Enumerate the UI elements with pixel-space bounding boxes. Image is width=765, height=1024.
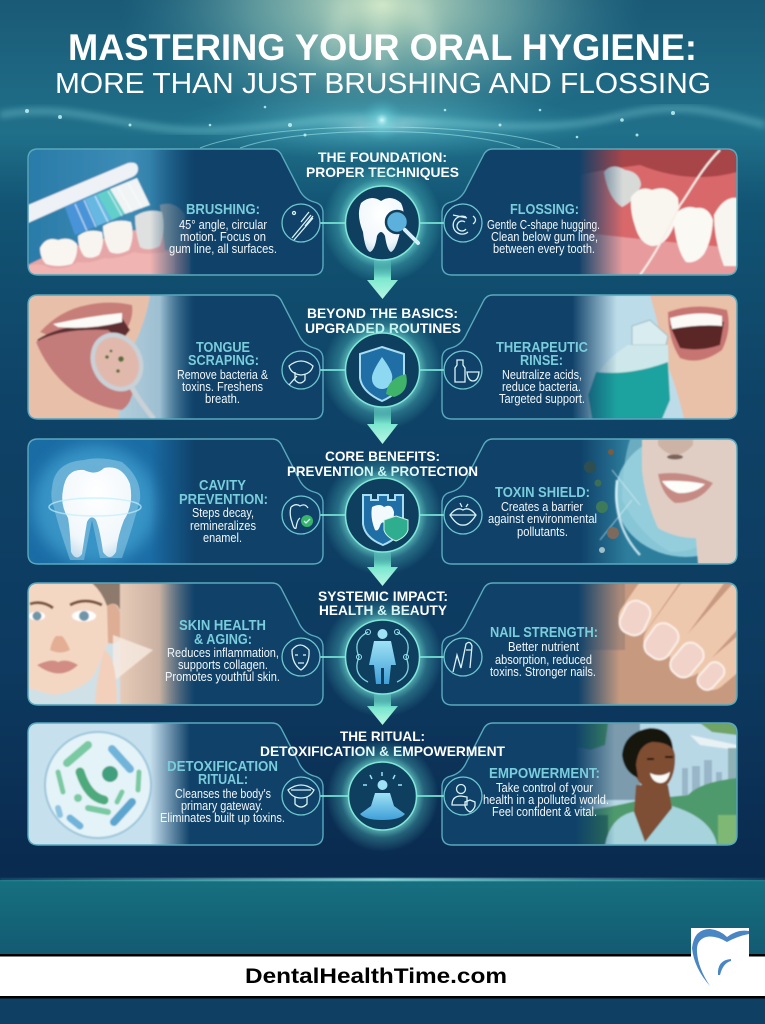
label: nail strength: absorption, reduced: [495, 652, 592, 667]
title: [55, 27, 711, 100]
icon: tongue: [282, 351, 320, 389]
panel: skin health: [28, 583, 323, 705]
panel: flossing: [442, 149, 737, 275]
label: cavity prevention: PREVENTION:: [179, 492, 268, 508]
label: cavity prevention: CAVITY: [199, 478, 246, 494]
label: detoxification ritual: Eliminates built up toxins.: [160, 810, 285, 825]
icon: meditating person: [326, 740, 438, 852]
icon: tooth with magnifier: [322, 163, 442, 283]
label: tongue scraping: SCRAPING:: [188, 353, 259, 369]
label: tongue scraping: toxins. Freshens: [182, 379, 263, 394]
icon: shield with tooth: [322, 455, 442, 575]
label: tongue scraping: TONGUE: [196, 340, 250, 356]
logo: blue tooth: [691, 928, 749, 986]
label: empowerment: Take control of your: [496, 780, 594, 795]
label: tongue scraping: Remove bacteria &: [177, 367, 268, 382]
label: brushing: gum line, all surfaces.: [169, 241, 277, 256]
label: detoxification ritual: [160, 759, 285, 825]
title: MASTERING YOUR ORAL HYGIENE:: [68, 27, 697, 68]
label: empowerment: EMPOWERMENT:: [489, 766, 600, 782]
teal footer band: [0, 878, 765, 955]
label: tongue scraping: [177, 340, 268, 406]
icon: lips: [444, 496, 482, 534]
label: cavity prevention: [179, 478, 268, 545]
heading: beyond the basics: UPGRADED ROUTINES: [305, 320, 461, 336]
label: nail strength: [490, 625, 598, 679]
heading: the ritual: [260, 728, 505, 759]
label: brushing: motion. Focus on: [180, 229, 266, 244]
label: skin health: & AGING:: [194, 632, 252, 648]
heading: core benefits: CORE BENEFITS:: [325, 448, 440, 464]
label: empowerment: [483, 766, 609, 819]
connector: [320, 222, 445, 224]
label: toxin shield: against environmental: [488, 511, 597, 526]
label: cavity prevention: remineralizes: [190, 518, 256, 533]
label: tongue scraping: breath.: [205, 391, 240, 406]
label: toxin shield: Creates a barrier: [501, 499, 584, 514]
photo: face in protective bubble: [584, 440, 736, 564]
label: toxin shield: pollutants.: [517, 524, 568, 539]
label: therapeutic rinse: RINSE:: [520, 353, 563, 369]
icon: human figure network: [322, 597, 442, 717]
panel: tongue scraping: [28, 295, 323, 419]
heading: systemic impact: HEALTH & BEAUTY: [319, 602, 448, 618]
label: brushing: [169, 202, 277, 256]
heading: beyond the basics: [305, 305, 461, 336]
icon: finger nail: [444, 638, 482, 676]
icon: person with shield: [444, 777, 482, 815]
footer strip with website: [0, 954, 765, 1024]
label: toxin shield: TOXIN SHIELD:: [495, 485, 590, 501]
icon: toothbrush: [282, 204, 320, 242]
connector: [320, 656, 445, 658]
heading: the ritual: THE RITUAL:: [340, 728, 425, 744]
label: cavity prevention: enamel.: [203, 530, 242, 545]
label: therapeutic rinse: Neutralize acids,: [502, 367, 582, 382]
photo: glowing tooth: [28, 440, 189, 564]
label: flossing: between every tooth.: [493, 241, 595, 256]
label: detoxification ritual: DETOXIFICATION: [167, 759, 278, 775]
panel: nail strength: [441, 582, 738, 706]
label: empowerment: Feel confident & vital.: [492, 804, 597, 819]
label: detoxification ritual: Cleanses the body's: [175, 786, 271, 801]
label: nail strength: Better nutrient: [508, 639, 579, 654]
connector: [320, 795, 445, 797]
heading: the foundation: [306, 149, 459, 180]
panel: detoxification ritual: [28, 723, 323, 845]
icon: face: [282, 638, 320, 676]
label: flossing: [487, 202, 600, 256]
connecting arrows: [367, 258, 398, 725]
row 1: [28, 149, 737, 283]
heading: the foundation: PROPER TECHNIQUES: [306, 164, 459, 180]
label: therapeutic rinse: Targeted support.: [499, 391, 585, 406]
heading: systemic impact: SYSTEMIC IMPACT:: [318, 588, 448, 604]
panel: empowerment: [442, 723, 737, 845]
label: toxin shield: [488, 485, 597, 539]
photo: woman's face and skin: [28, 584, 192, 704]
label: brushing: BRUSHING:: [186, 202, 260, 218]
label: skin health: SKIN HEALTH: [179, 618, 266, 634]
photo: bacteria in bubble: [28, 724, 188, 844]
heading: the foundation: THE FOUNDATION:: [318, 149, 447, 165]
heading: systemic impact: [318, 588, 448, 618]
panel: toxin shield: [442, 433, 757, 564]
panel: cavity prevention: [28, 439, 323, 565]
row 4: [27, 582, 738, 714]
icon: bottle and bowl: [444, 351, 482, 389]
label: skin health: supports collagen.: [178, 657, 268, 672]
photo: smiling woman in park: [577, 724, 736, 844]
label: flossing: FLOSSING:: [510, 202, 579, 218]
label: skin health: Reduces inflammation,: [167, 645, 279, 660]
label: nail strength: NAIL STRENGTH:: [490, 625, 598, 641]
label: flossing: Gentle C-shape hugging.: [487, 217, 600, 232]
panel: brushing: [28, 149, 323, 275]
photo: hand with nails: [580, 584, 736, 704]
heading: core benefits: [287, 448, 478, 479]
label: nail strength: toxins. Stronger nails.: [490, 664, 596, 679]
footer strip with website: DentalHealthTime.com: [245, 965, 507, 988]
label: empowerment: health in a polluted world.: [483, 792, 609, 807]
icon: floss: [444, 204, 482, 242]
heading: core benefits: PREVENTION & PROTECTION: [287, 463, 478, 479]
label: cavity prevention: Steps decay,: [192, 505, 254, 520]
label: skin health: Promotes youthful skin.: [165, 669, 280, 684]
label: therapeutic rinse: reduce bacteria.: [502, 379, 581, 394]
label: therapeutic rinse: THERAPEUTIC: [496, 340, 588, 356]
label: therapeutic rinse: [496, 340, 588, 406]
photo: mouth and rinse bottle: [574, 296, 736, 418]
photo: tongue and scraper: [28, 296, 190, 418]
row 2: [28, 295, 737, 430]
heading: beyond the basics: BEYOND THE BASICS:: [307, 305, 458, 321]
row 3: [28, 433, 757, 575]
panel: therapeutic rinse: [442, 295, 737, 419]
connector: [320, 514, 445, 516]
label: brushing: 45° angle, circular: [179, 217, 268, 232]
label: detoxification ritual: primary gateway.: [181, 798, 263, 813]
label: flossing: Clean below gum line,: [491, 229, 598, 244]
heading: the ritual: DETOXIFICATION & EMPOWERMENT: [260, 743, 505, 759]
icon: tooth check: [282, 496, 320, 534]
title: MORE THAN JUST BRUSHING AND FLOSSING: [55, 68, 711, 100]
icon: shield with drop and leaf: [322, 310, 442, 430]
photo: toothbrush on teeth: [28, 150, 191, 274]
row 5: [28, 723, 737, 852]
connector: [320, 369, 445, 371]
photo: flossing teeth: [580, 150, 736, 274]
icon: tongue out: [282, 777, 320, 815]
label: detoxification ritual: RITUAL:: [198, 772, 248, 788]
label: skin health: [165, 618, 280, 684]
